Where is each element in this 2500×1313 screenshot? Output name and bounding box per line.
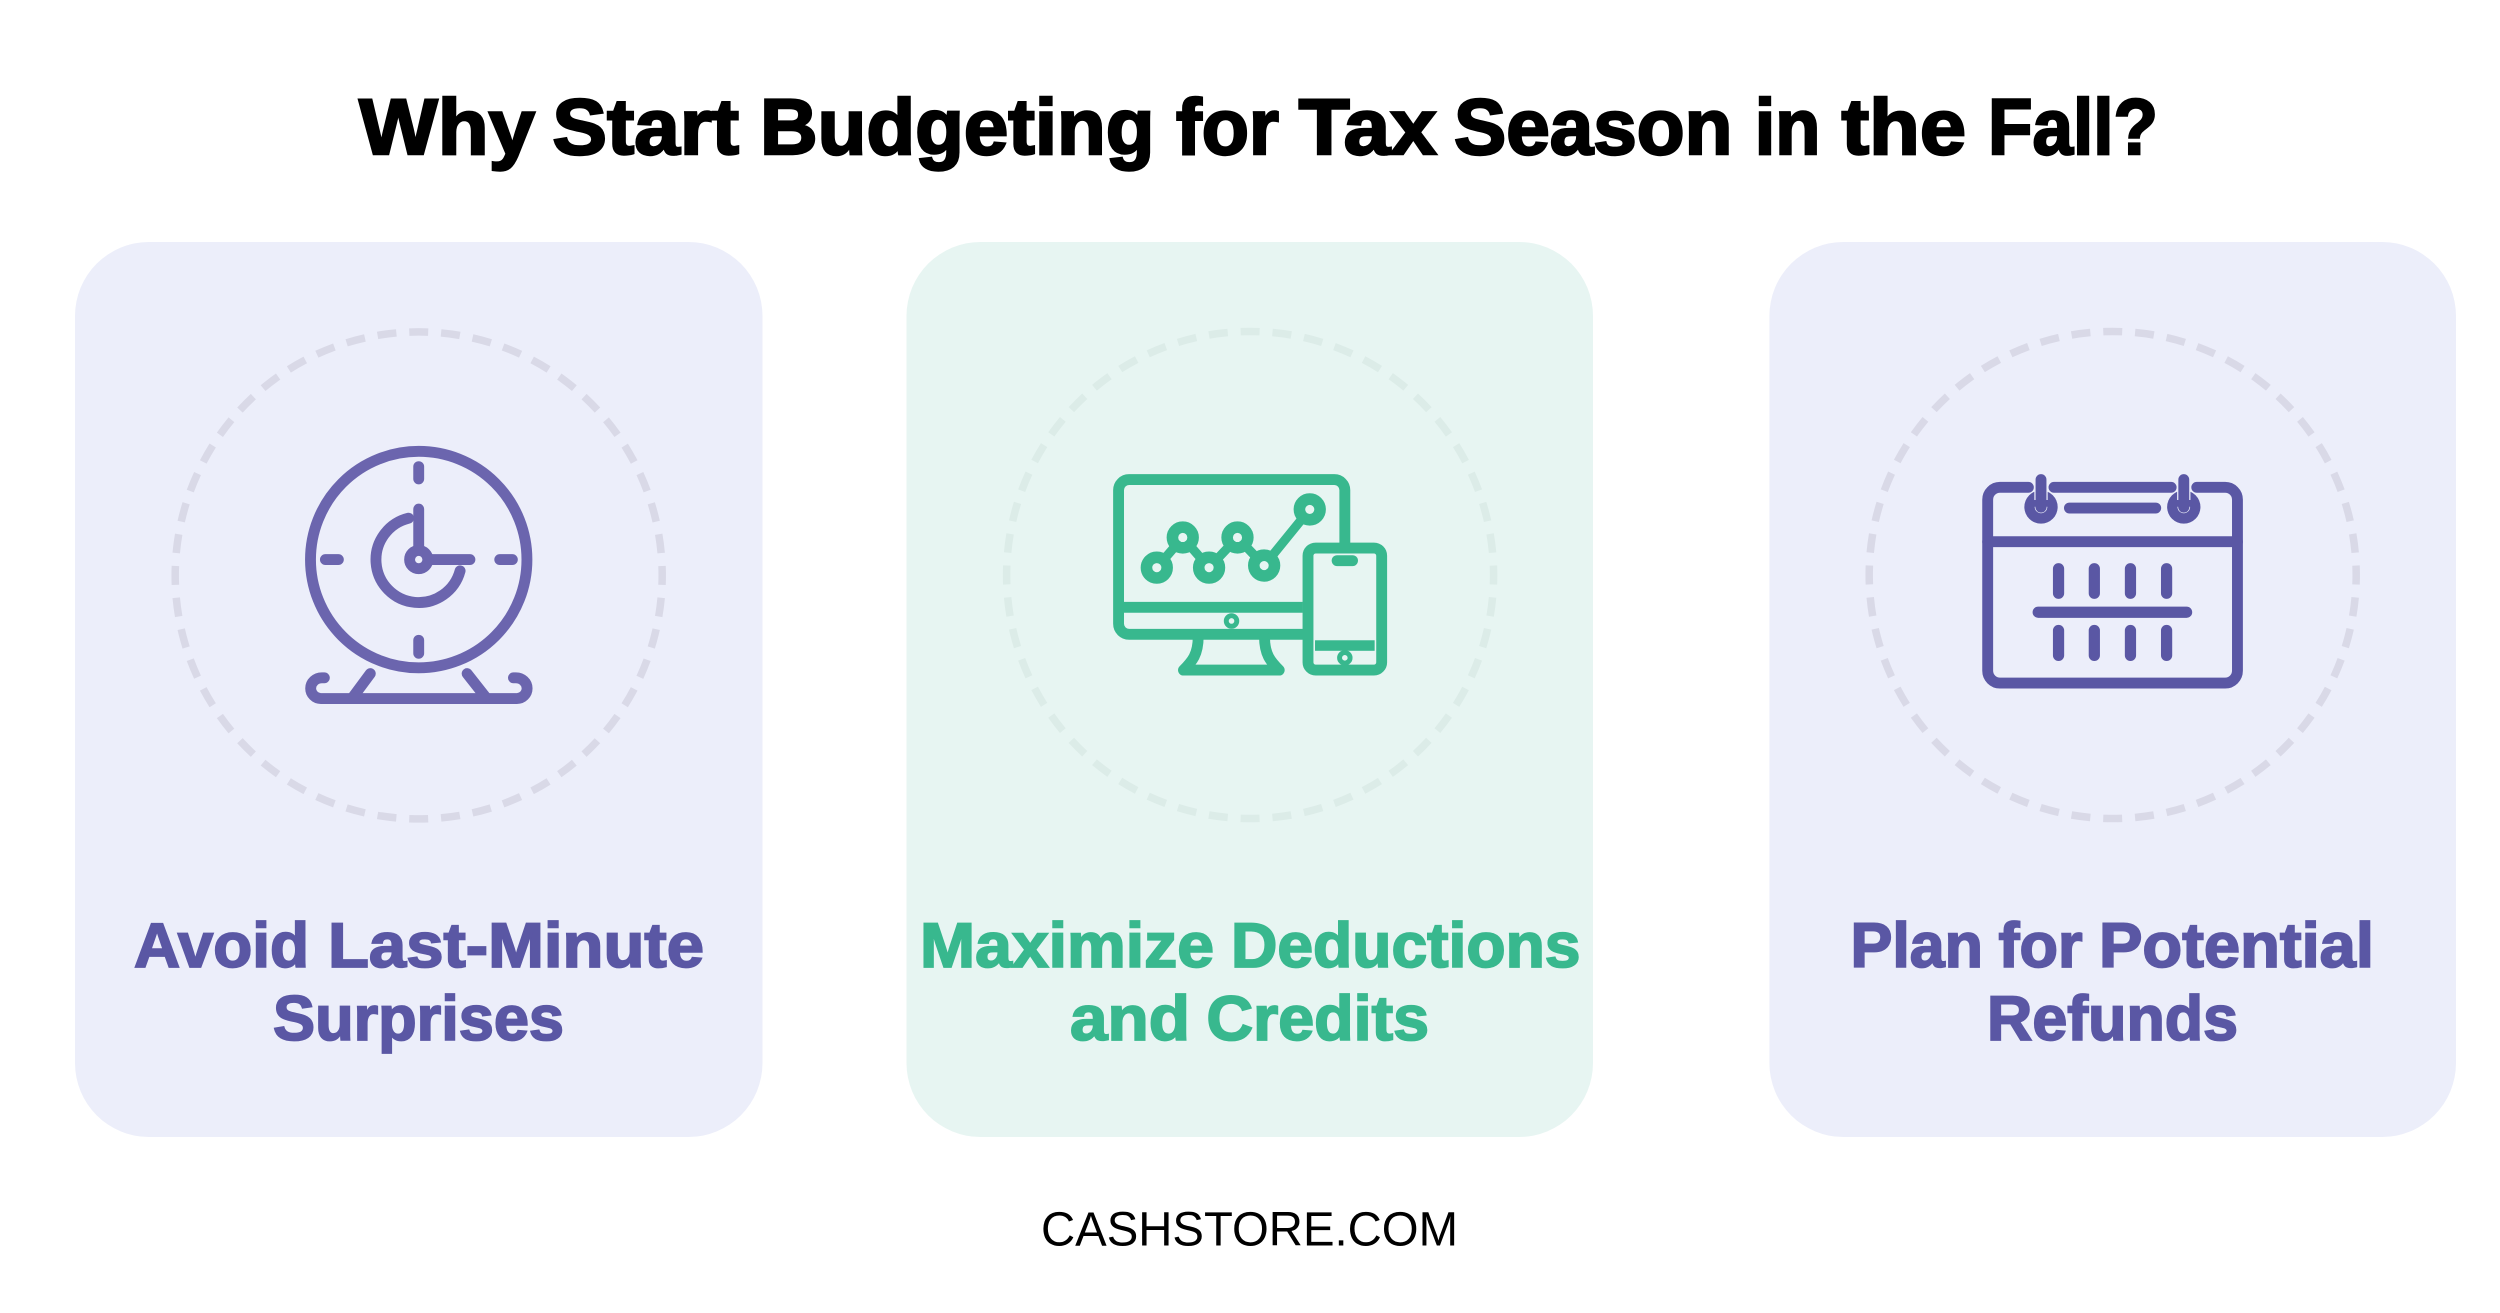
panel heading: Last-Minute xyxy=(328,911,704,981)
panel heading xyxy=(920,911,1580,1054)
title: in xyxy=(1755,82,1820,171)
title: Tax xyxy=(1299,82,1437,171)
icon: monitor and phone with line chart xyxy=(1119,480,1382,670)
title: Start xyxy=(552,82,739,171)
panel heading: for xyxy=(1998,911,2082,981)
panel heading: Plan xyxy=(1850,911,1983,981)
panel heading: and xyxy=(1070,984,1190,1054)
panel heading: Maximize xyxy=(920,911,1214,981)
panel background xyxy=(1769,242,2456,1137)
title: Why xyxy=(359,82,535,171)
panel heading: Refunds xyxy=(1987,984,2238,1054)
panel: avoid last-minute surprises xyxy=(75,242,762,1137)
panel heading: Deductions xyxy=(1231,911,1580,981)
panel heading: Credits xyxy=(1206,984,1429,1054)
icon: clock xyxy=(310,451,527,699)
panel heading: Avoid xyxy=(134,911,309,981)
dashed circle xyxy=(1869,332,2356,818)
icon: calendar xyxy=(1988,477,2237,683)
panel background xyxy=(906,242,1593,1137)
panel heading xyxy=(1850,911,2374,1054)
title: Fall? xyxy=(1988,82,2158,171)
title xyxy=(359,82,2158,171)
title: Season xyxy=(1454,82,1732,171)
panel: plan for potential refunds xyxy=(1769,242,2456,1137)
panel heading: Surprises xyxy=(273,984,564,1054)
title: Budgeting xyxy=(760,82,1154,171)
panel heading: Potential xyxy=(2099,911,2374,981)
dashed circle xyxy=(1007,332,1494,818)
panel: maximize deductions and credits xyxy=(906,242,1593,1137)
title: for xyxy=(1176,82,1279,171)
footer brand: CASHSTORE.COM xyxy=(1041,1204,1458,1256)
title: the xyxy=(1842,82,1966,171)
panel background xyxy=(75,242,762,1137)
panel heading xyxy=(134,911,704,1054)
dashed circle xyxy=(175,332,662,819)
